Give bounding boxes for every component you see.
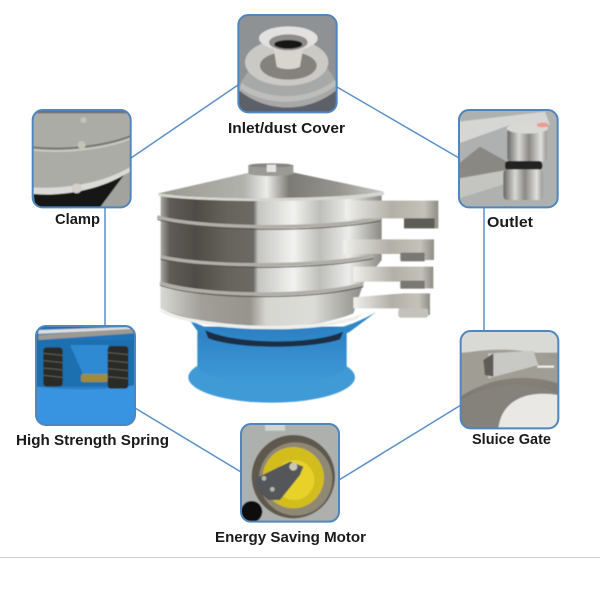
label: high strength spring: High Strength Spring (16, 432, 169, 449)
panel: high strength spring (36, 326, 135, 425)
panel: sluice gate (461, 331, 558, 428)
panel: outlet (459, 110, 558, 207)
stainless spouts (343, 201, 438, 318)
label: energy saving motor: Energy Saving Motor (215, 529, 366, 546)
dome cover (158, 163, 384, 201)
panel: clamp (33, 110, 131, 207)
drum tiers (160, 195, 382, 329)
label: sluice gate: Sluice Gate (472, 431, 551, 448)
clamping rings (157, 217, 380, 294)
panel: energy saving motor (241, 424, 339, 522)
blue base (188, 312, 377, 403)
bottom divider (0, 556, 600, 558)
central machine: vibrating sieve (157, 163, 438, 403)
label: clamp: Clamp (55, 211, 100, 228)
label: inlet/dust cover: Inlet/dust Cover (228, 120, 345, 137)
panel: inlet/dust cover (238, 15, 337, 112)
connector lines (105, 85, 484, 480)
label: outlet: Outlet (487, 214, 533, 231)
